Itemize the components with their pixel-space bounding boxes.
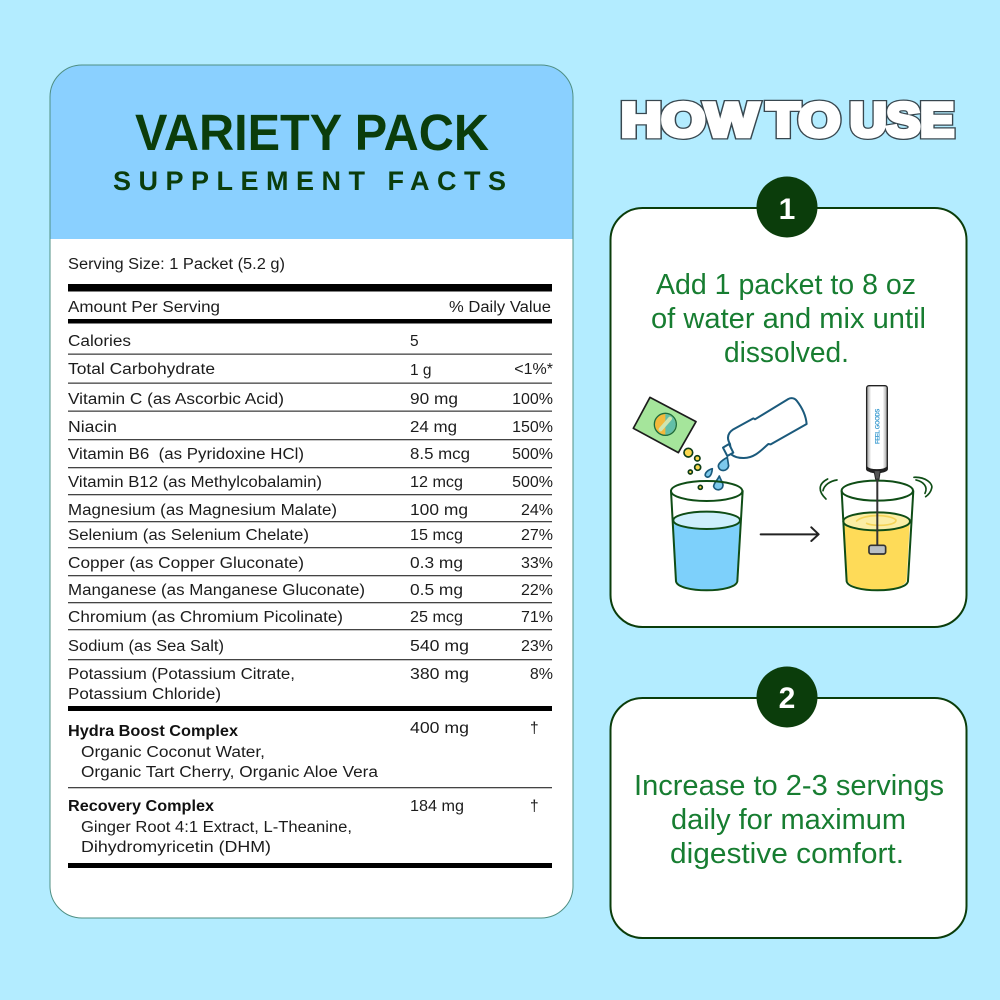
row: magnesium: 100 mg — [410, 502, 468, 519]
row: chromium — [68, 609, 553, 626]
row: vitamin b12: 500% — [512, 474, 553, 491]
text: step 2 instruction: digestive comfort. — [670, 838, 904, 870]
row: vitamin c: 90 mg — [410, 391, 458, 408]
row: total carbohydrate: Total Carbohydrate — [68, 361, 215, 378]
icon: motion lines — [820, 477, 932, 499]
icon: water glass — [671, 481, 743, 590]
row: manganese — [68, 582, 553, 599]
row: hydra boost complex: † — [530, 720, 539, 737]
row: selenium: Selenium (as Selenium Chelate) — [68, 527, 309, 544]
row: sodium: 23% — [521, 638, 553, 655]
row: sodium — [68, 638, 553, 655]
table header — [68, 299, 551, 316]
heading: how to use — [621, 93, 954, 146]
text: step 2 instruction — [634, 770, 944, 870]
row: chromium: 71% — [521, 609, 553, 626]
row: vitamin b6: 8.5 mcg — [410, 446, 470, 463]
row: recovery complex — [68, 798, 539, 856]
row: hydra boost complex: Organic Tart Cherry, Organic Aloe Vera — [81, 764, 378, 781]
row: hydra boost complex — [68, 720, 539, 781]
row: selenium — [68, 527, 553, 544]
row: recovery complex: Recovery Complex — [68, 798, 214, 815]
row: niacin: 24 mg — [410, 419, 457, 436]
row: calories — [68, 333, 419, 350]
table header: % Daily Value — [449, 299, 551, 316]
row: niacin: 150% — [512, 419, 553, 436]
row: magnesium: 24% — [521, 502, 553, 519]
row: niacin: Niacin — [68, 419, 117, 436]
row: potassium — [68, 666, 553, 703]
row: chromium: 25 mcg — [410, 609, 463, 626]
table header: Amount Per Serving — [68, 299, 220, 316]
row: potassium: 8% — [530, 666, 553, 683]
heading: how to use: USE — [850, 93, 954, 146]
row: vitamin c: Vitamin C (as Ascorbic Acid) — [68, 391, 284, 408]
text: step 1 instruction: dissolved. — [724, 337, 849, 369]
row: selenium: 27% — [521, 527, 553, 544]
badge: 2: 2 — [779, 682, 795, 715]
row: vitamin c: 100% — [512, 391, 553, 408]
badge: 2 — [756, 666, 818, 728]
row: manganese: 22% — [521, 582, 553, 599]
text: step 1 instruction: of water and mix until — [651, 303, 926, 335]
row: potassium: Potassium Chloride) — [68, 686, 221, 703]
heading: how to use: HOW — [621, 93, 759, 146]
row: magnesium: Magnesium (as Magnesium Malate) — [68, 502, 337, 519]
row: hydra boost complex: Organic Coconut Water, — [81, 744, 265, 761]
text: step 2 instruction: daily for maximum — [671, 804, 906, 836]
icon: drops — [705, 457, 729, 490]
panel: step 1 — [610, 176, 966, 627]
row: potassium: Potassium (Potassium Citrate, — [68, 666, 295, 683]
icon: packet — [633, 397, 696, 453]
row: total carbohydrate: 1 g — [410, 362, 432, 379]
badge: 1: 1 — [779, 193, 795, 226]
row: vitamin b12: 12 mcg — [410, 474, 463, 491]
row: vitamin c — [68, 391, 553, 408]
row: vitamin b12 — [68, 474, 553, 491]
row: copper: 33% — [521, 555, 553, 572]
row: copper: 0.3 mg — [410, 555, 463, 572]
row: sodium: 540 mg — [410, 638, 469, 655]
row: recovery complex: Ginger Root 4:1 Extract, L-Theanine, — [81, 819, 352, 836]
row: calories: 5 — [410, 333, 419, 350]
row: manganese: Manganese (as Manganese Gluconate) — [68, 582, 365, 599]
row: potassium: 380 mg — [410, 666, 469, 683]
row: recovery complex: 184 mg — [410, 798, 464, 815]
row: recovery complex: Dihydromyricetin (DHM) — [81, 839, 271, 856]
row: calories: Calories — [68, 333, 131, 350]
icon: frother — [867, 386, 887, 554]
panel: step 2 — [610, 666, 966, 938]
row: vitamin b6: 500% — [512, 446, 553, 463]
row: copper — [68, 555, 553, 572]
text: step 2 instruction: Increase to 2-3 servings — [634, 770, 944, 802]
heading: supplement facts: SUPPLEMENT FACTS — [113, 166, 506, 196]
heading: how to use: TO — [767, 93, 840, 146]
row: total carbohydrate: <1%* — [514, 361, 553, 378]
row: vitamin b6 — [68, 446, 553, 463]
row: niacin — [68, 419, 553, 436]
heading: variety pack: VARIETY PACK — [135, 104, 489, 161]
row: vitamin b6: Vitamin B6 (as Pyridoxine HCl) — [68, 446, 304, 463]
row: sodium: Sodium (as Sea Salt) — [68, 638, 224, 655]
badge: 1 — [756, 176, 818, 238]
heading: how to use: TO — [767, 93, 840, 146]
row: total carbohydrate — [68, 361, 553, 379]
text: step 1 instruction — [651, 269, 926, 369]
row: vitamin b12: Vitamin B12 (as Methylcobalamin) — [68, 474, 322, 491]
text: step 1 instruction: Add 1 packet to 8 oz — [656, 269, 916, 301]
icon: mixed glass — [842, 481, 913, 590]
row: chromium: Chromium (as Chromium Picolinate) — [68, 609, 343, 626]
row: hydra boost complex: 400 mg — [410, 720, 469, 737]
row: manganese: 0.5 mg — [410, 582, 463, 599]
illustration: mixing steps — [633, 386, 932, 590]
row: selenium: 15 mcg — [410, 527, 463, 544]
heading: how to use: USE — [850, 93, 954, 146]
icon: powder dots — [684, 448, 702, 489]
row: magnesium — [68, 502, 553, 519]
heading: how to use: HOW — [621, 93, 759, 146]
text: serving size: Serving Size: 1 Packet (5.2 g) — [68, 256, 285, 273]
panel: supplement facts — [50, 65, 573, 918]
row: copper: Copper (as Copper Gluconate) — [68, 555, 304, 572]
icon: frother: FEEL GOODS — [875, 409, 881, 444]
icon: bottle — [723, 398, 807, 458]
arrow — [761, 527, 819, 541]
row: recovery complex: † — [530, 798, 539, 815]
row: hydra boost complex: Hydra Boost Complex — [68, 723, 238, 740]
